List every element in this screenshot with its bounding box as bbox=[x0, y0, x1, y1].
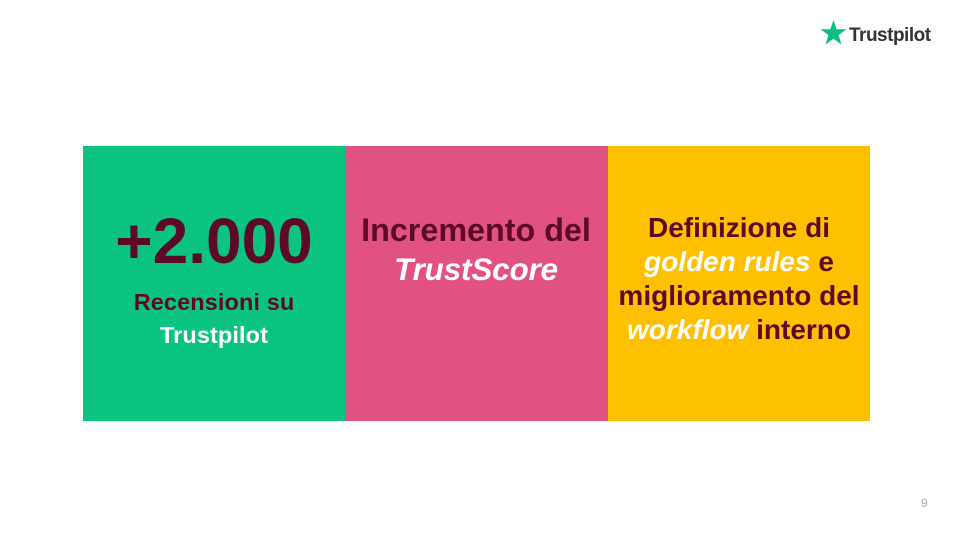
panel text: Definizione di bbox=[648, 212, 830, 243]
panel: golden rules bbox=[608, 146, 870, 421]
big number: +2.000 bbox=[115, 205, 313, 277]
logo wordmark: Trustpilot bbox=[849, 25, 931, 46]
panel text bbox=[361, 212, 591, 287]
panel text: golden rules e bbox=[644, 246, 834, 277]
panel: TrustScore bbox=[345, 146, 608, 421]
panel text: miglioramento del bbox=[618, 280, 860, 311]
icon: green star bbox=[820, 20, 846, 44]
caption: Trustpilot bbox=[160, 322, 268, 348]
panel: reviews bbox=[83, 146, 345, 421]
caption: Recensioni su bbox=[134, 289, 294, 315]
panel text: workflow interno bbox=[627, 314, 851, 345]
caption bbox=[134, 289, 294, 348]
panel text: TrustScore bbox=[394, 251, 558, 287]
logo: Trustpilot bbox=[820, 20, 931, 46]
panel text: Incremento del bbox=[361, 212, 591, 248]
panel text bbox=[618, 212, 860, 345]
page number: 9 bbox=[921, 496, 928, 510]
